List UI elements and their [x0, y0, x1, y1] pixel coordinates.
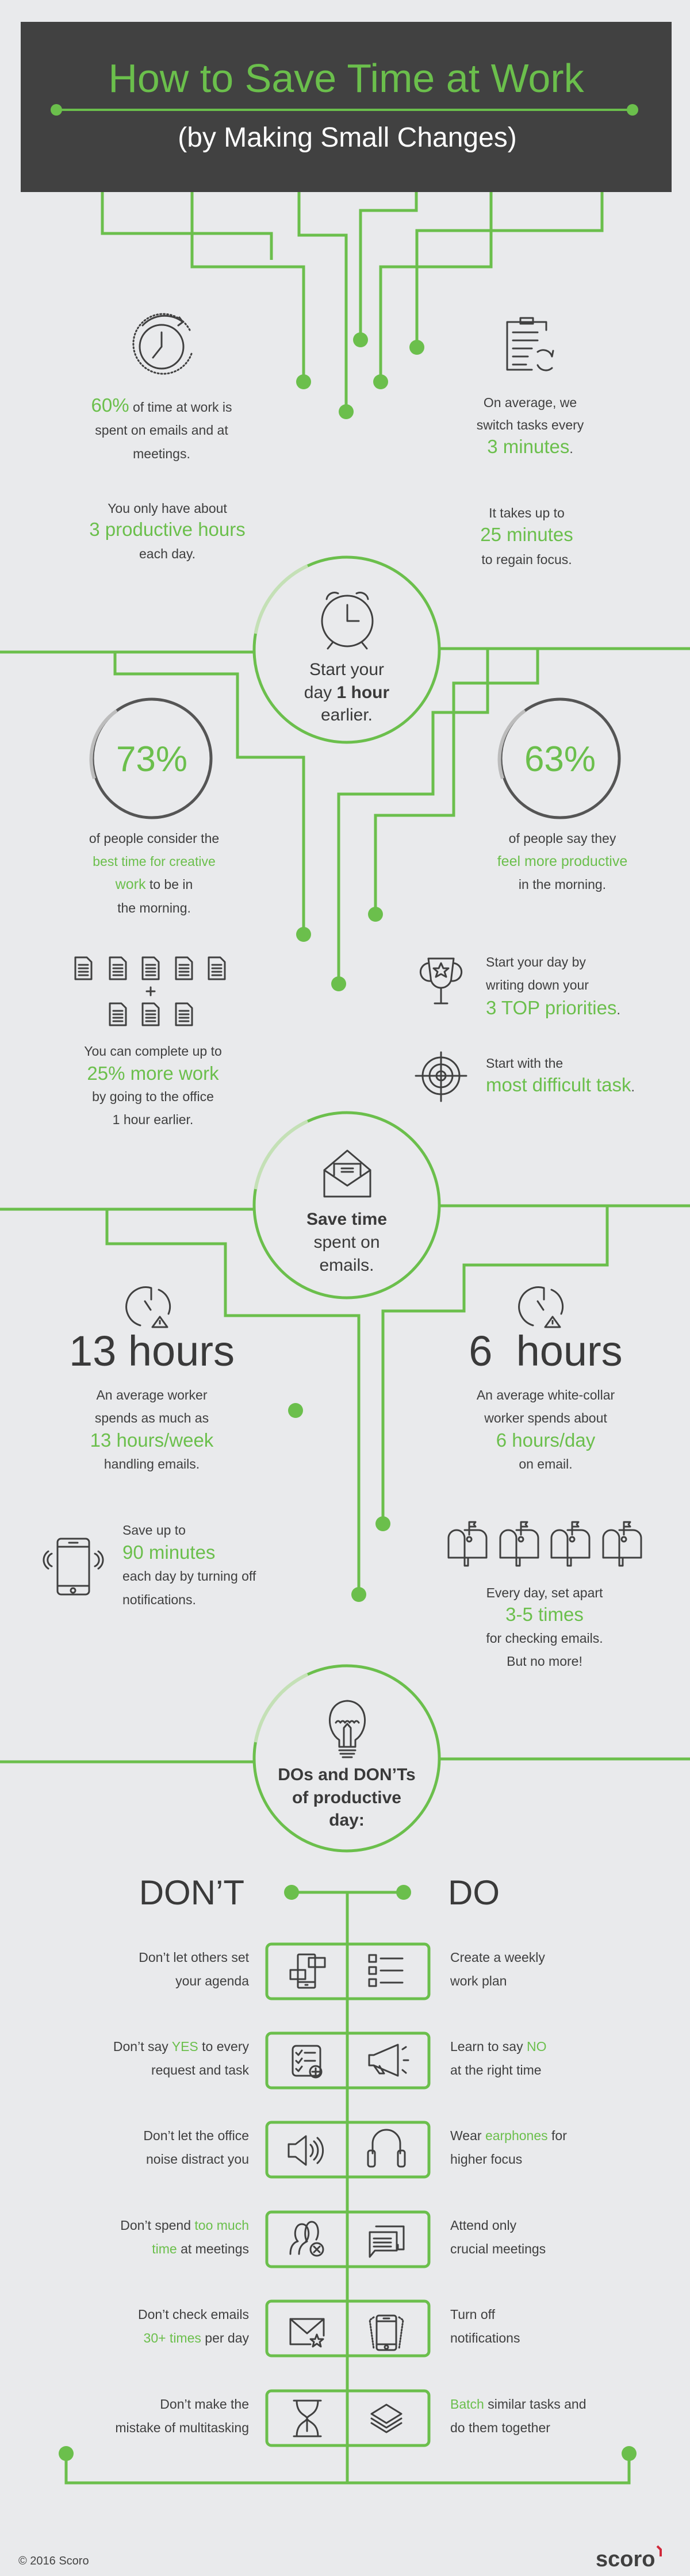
- row 4: meetings: Attend only: [450, 2218, 517, 2233]
- text: 3-5 times: 3-5 times: [505, 1604, 584, 1625]
- text: most difficult task: Start with the: [486, 1056, 563, 1071]
- row 1: agenda / weekly plan: Don’t let others set: [139, 1950, 250, 1965]
- text: productive hours: each day.: [139, 546, 195, 561]
- row 5: emails / notifications: [138, 2301, 520, 2356]
- text: creative work: [89, 831, 219, 915]
- icon: phone: [44, 1539, 103, 1594]
- circle: save time on emails: spent on: [313, 1233, 380, 1252]
- text: 90 minutes: notifications.: [122, 1592, 196, 1607]
- text: switch tasks: On average, we: [484, 395, 577, 410]
- text: switch tasks: switch tasks every: [477, 417, 584, 432]
- row 3: office noise / earphones: higher focus: [450, 2152, 522, 2167]
- row 4: meetings: [120, 2212, 546, 2267]
- text: regain focus: to regain focus.: [481, 552, 572, 567]
- row 2: say yes / say no: [113, 2033, 546, 2088]
- row 6: multitasking / batch: do them together: [450, 2420, 550, 2435]
- icon: alarm clock: [322, 593, 373, 649]
- text: feel more productive: of people say they: [509, 831, 616, 846]
- row 4: meetings: crucial meetings: [450, 2241, 546, 2256]
- title divider: [51, 104, 638, 116]
- circle: dos and don'ts: of productive: [292, 1788, 401, 1807]
- section 3 connector lines: [0, 1759, 690, 1762]
- circle: dos and don'ts: DOs and DON’Ts: [278, 1765, 416, 1784]
- header: [21, 22, 672, 192]
- row 4: meetings: time at meetings: [152, 2241, 249, 2256]
- text: 3-5 times: for checking emails.: [486, 1631, 603, 1646]
- icon: light bulb: [329, 1701, 365, 1757]
- row 6: multitasking / batch: [115, 2391, 586, 2445]
- timeline connector: [59, 1885, 637, 2483]
- text: 60%: spent on emails and at: [95, 423, 228, 438]
- text: feel more productive: in the morning.: [519, 877, 606, 892]
- subtitle: (by Making Small Changes): [178, 122, 517, 153]
- ring: 63%: 63%: [524, 739, 596, 779]
- circuit lines from header: [102, 192, 602, 419]
- row 6: multitasking / batch: Batch similar tasks and: [450, 2397, 586, 2412]
- row 3: office noise / earphones: [143, 2122, 567, 2177]
- row 4: meetings: Don’t spend too much: [120, 2218, 249, 2233]
- icon: envelope: [324, 1151, 370, 1197]
- text: creative work: best time for creative: [93, 854, 216, 869]
- row 3: office noise / earphones: Don’t let the office: [143, 2128, 249, 2143]
- title: How to Save Time at Work: [108, 56, 585, 101]
- text: regain focus: [480, 505, 573, 567]
- text: 6 hours/day: worker spends about: [484, 1410, 607, 1425]
- row 1: agenda / weekly plan: work plan: [450, 1973, 507, 1988]
- text: top priorities: writing down your: [485, 977, 589, 992]
- heading: DO: DO: [448, 1873, 500, 1912]
- section 2 connector lines: [0, 1206, 690, 1602]
- text: creative work: the morning.: [117, 900, 191, 915]
- icon: gauge warning left: [126, 1287, 170, 1327]
- text: 6 hours/day: on email.: [519, 1456, 573, 1471]
- row 5: emails / notifications: notifications: [450, 2330, 520, 2345]
- text: 13 hours/week: handling emails.: [104, 1456, 200, 1471]
- icon: gauge warning right: [519, 1287, 563, 1327]
- text: 3-5 times: [486, 1585, 603, 1669]
- text: productive hours: You only have about: [108, 501, 227, 516]
- text: most difficult task: [486, 1056, 635, 1095]
- text: 13 hours/week: [90, 1387, 214, 1471]
- text: 90 minutes: [122, 1523, 256, 1607]
- text: 25% more work: 25% more work: [87, 1063, 219, 1084]
- text: creative work: work to be in: [115, 876, 193, 892]
- icon: clipboard: [507, 318, 553, 370]
- text: top priorities: Start your day by: [486, 954, 586, 969]
- circle: start your day: [254, 557, 439, 742]
- text: 13 hours/week: An average worker: [96, 1387, 208, 1402]
- text: 13 hours/week: spends as much as: [95, 1410, 209, 1425]
- row 1: agenda / weekly plan: your agenda: [175, 1973, 249, 1988]
- text: top priorities: [485, 954, 620, 1018]
- icon: clock: [133, 314, 192, 374]
- row 1: agenda / weekly plan: [139, 1944, 545, 1999]
- text: 90 minutes: 90 minutes: [122, 1542, 215, 1563]
- text: 6 hours/day: [477, 1387, 615, 1471]
- stat: 13 hours: 13 hours: [69, 1327, 235, 1375]
- text: switch tasks: 3 minutes.: [487, 436, 573, 457]
- text: 90 minutes: Save up to: [122, 1523, 186, 1538]
- circle: start your day: day 1 hour: [304, 683, 390, 702]
- row 2: say yes / say no: Don’t say YES to every: [113, 2039, 249, 2054]
- footer logo: scoro: [596, 2547, 655, 2571]
- row 6: multitasking / batch: mistake of multitasking: [115, 2420, 249, 2435]
- text: switch tasks: [477, 395, 584, 457]
- text: most difficult task: most difficult task.: [486, 1074, 635, 1095]
- text: 6 hours/day: An average white-collar: [477, 1387, 615, 1402]
- text: 3-5 times: But no more!: [507, 1654, 582, 1669]
- circle: save time on emails: emails.: [319, 1256, 374, 1275]
- row 5: emails / notifications: Don’t check emails: [138, 2307, 249, 2322]
- text: feel more productive: [497, 831, 627, 892]
- ring: 73%: 73%: [116, 739, 187, 779]
- text: 25% more work: by going to the office: [92, 1089, 214, 1104]
- row 3: office noise / earphones: Wear earphones for: [450, 2128, 567, 2143]
- circle: dos and don'ts: [254, 1666, 439, 1851]
- text: 25% more work: 1 hour earlier.: [113, 1112, 193, 1127]
- text: productive hours: [89, 501, 246, 561]
- row 5: emails / notifications: Turn off: [450, 2307, 496, 2322]
- text: 13 hours/week: 13 hours/week: [90, 1429, 214, 1451]
- row 2: say yes / say no: request and task: [151, 2063, 249, 2077]
- text: 60%: 60% of time at work is: [91, 394, 232, 416]
- row 2: say yes / say no: Learn to say NO: [450, 2039, 546, 2054]
- text: creative work: of people consider the: [89, 831, 219, 846]
- text: 25% more work: You can complete up to: [84, 1044, 222, 1059]
- ring: 73%: [91, 699, 211, 818]
- text: regain focus: It takes up to: [489, 505, 565, 520]
- section 1 connector lines: [0, 649, 690, 991]
- circle: save time on emails: Save time: [306, 1210, 387, 1229]
- circle: save time on emails: [254, 1113, 439, 1298]
- row 2: say yes / say no: at the right time: [450, 2063, 542, 2077]
- row 3: office noise / earphones: noise distract you: [146, 2152, 249, 2167]
- text: feel more productive: feel more productive: [497, 853, 627, 869]
- text: top priorities: 3 TOP priorities.: [486, 997, 620, 1018]
- text: regain focus: 25 minutes: [480, 524, 573, 545]
- icon: mailboxes: [448, 1522, 641, 1566]
- text: 60%: [91, 394, 232, 461]
- icon: documents: [75, 957, 225, 1025]
- row 1: agenda / weekly plan: Create a weekly: [450, 1950, 545, 1965]
- text: 25% more work: [84, 1044, 222, 1127]
- icon: target: [416, 1052, 466, 1101]
- text: 90 minutes: each day by turning off: [122, 1569, 256, 1584]
- stat: 6 hours: 6 hours: [469, 1327, 623, 1375]
- text: 60%: meetings.: [133, 446, 190, 461]
- row 6: multitasking / batch: Don’t make the: [160, 2397, 249, 2412]
- circle: start your day: Start your: [309, 660, 384, 679]
- footer copyright: © 2016 Scoro: [18, 2555, 89, 2567]
- icon: trophy: [420, 959, 462, 1003]
- row 5: emails / notifications: 30+ times per day: [144, 2330, 249, 2345]
- circle: dos and don'ts: day:: [329, 1811, 365, 1830]
- heading: DON'T: DON’T: [139, 1873, 244, 1912]
- text: productive hours: 3 productive hours: [89, 519, 246, 540]
- text: 3-5 times: Every day, set apart: [486, 1585, 603, 1600]
- circle: start your day: earlier.: [321, 706, 373, 724]
- text: 6 hours/day: 6 hours/day: [496, 1429, 596, 1451]
- ring: 63%: [499, 699, 619, 818]
